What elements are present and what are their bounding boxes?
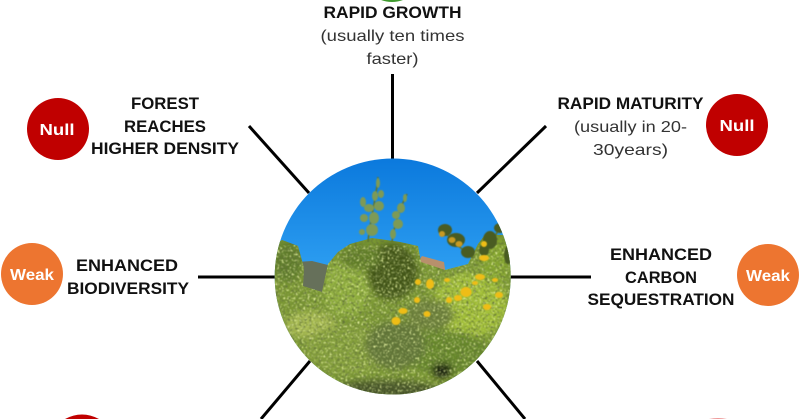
label: forest reaches higher density: FOREST: [131, 95, 199, 113]
badge: weak right: Weak: [746, 268, 790, 285]
label: rapid growth: faster): [366, 51, 418, 68]
label: forest reaches higher density: REACHES: [124, 118, 206, 136]
photo: flowering shrubs under blue sky: [270, 155, 515, 404]
label: rapid maturity: [558, 95, 704, 159]
label: forest reaches higher density: [91, 95, 239, 158]
label: enhanced carbon sequestration: ENHANCED: [610, 246, 712, 264]
badge: lower left: [65, 414, 99, 419]
label: rapid maturity: 30years): [593, 142, 668, 159]
badge: null left: [27, 98, 89, 160]
connector: lower right: [477, 361, 525, 419]
label: rapid maturity: (usually in 20-: [574, 119, 687, 136]
label: enhanced biodiversity: ENHANCED: [76, 257, 178, 275]
label: enhanced carbon sequestration: SEQUESTRATION: [588, 291, 734, 309]
label: enhanced carbon sequestration: CARBON: [625, 269, 697, 287]
badge: rapid growth: [381, 0, 403, 2]
badge: weak left: Weak: [10, 267, 54, 284]
label: enhanced biodiversity: [67, 257, 189, 298]
badge: weak right: [737, 244, 799, 306]
connector: top: [391, 74, 394, 160]
label: rapid maturity: RAPID MATURITY: [558, 95, 704, 113]
badge: null right: Null: [720, 118, 754, 135]
label: forest reaches higher density: HIGHER DENSITY: [91, 140, 239, 158]
badge: weak left: [1, 243, 63, 305]
label: enhanced carbon sequestration: [588, 246, 734, 309]
label: enhanced biodiversity: BIODIVERSITY: [67, 280, 189, 298]
badge: lower right: [709, 418, 727, 419]
connector: right: [510, 276, 591, 278]
badge: null left: Null: [40, 122, 74, 139]
label: rapid growth: RAPID GROWTH: [324, 4, 462, 22]
badge: null right: [706, 94, 768, 156]
connector: upper left: [249, 126, 309, 193]
label: rapid growth: (usually ten times: [320, 28, 464, 45]
connector: upper right: [477, 126, 546, 193]
label: rapid growth: [320, 4, 464, 68]
tall stems and branch: [359, 177, 512, 264]
connector: lower left: [261, 361, 310, 419]
connector: left: [198, 276, 276, 278]
